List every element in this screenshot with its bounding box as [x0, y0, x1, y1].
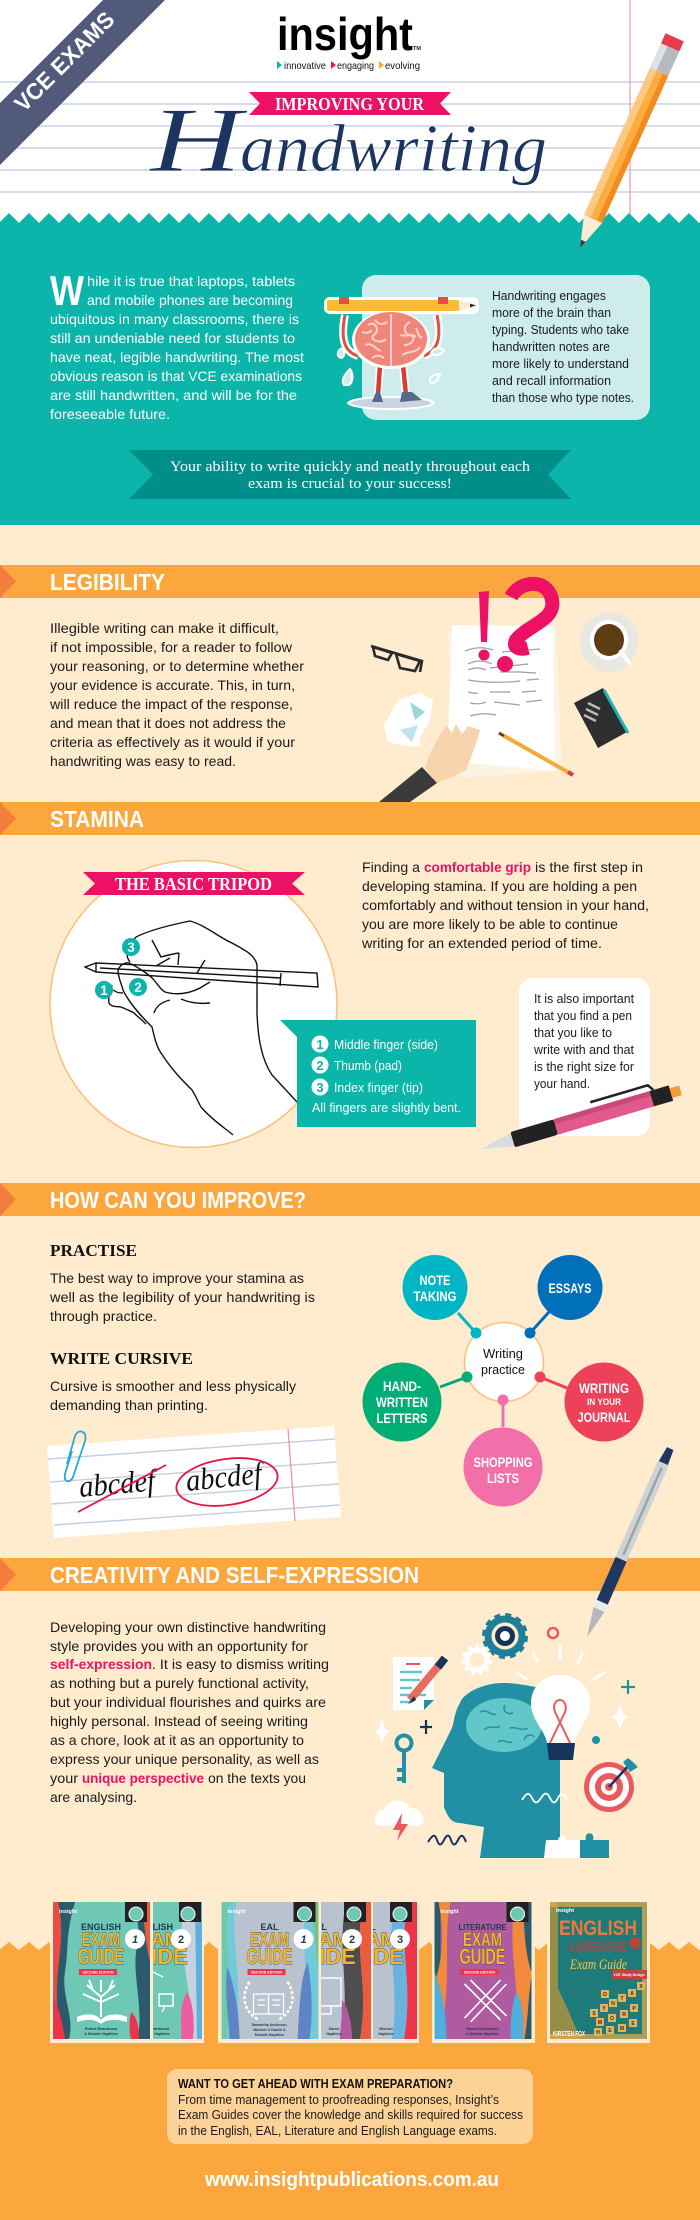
corner banner: VCE EXAMS: VCE EXAMS	[9, 6, 119, 117]
section band: how can you improve: HOW CAN YOU IMPROVE?	[50, 1187, 306, 1213]
callout: finger legend: Index finger (tip)	[334, 1081, 423, 1095]
logo: insight: TM	[413, 46, 421, 52]
callout: choose a pen: your hand.	[534, 1077, 590, 1091]
stamina paragraph	[361, 859, 649, 951]
corner banner: VCE EXAMS	[0, 0, 165, 165]
book: English Language Exam Guide: Exam Guide	[569, 1957, 627, 1973]
creativity paragraph: your	[50, 1770, 78, 1786]
creativity paragraph	[50, 1619, 329, 1805]
node: hand-written letters: HAND-	[383, 1379, 421, 1394]
section band: legibility: LEGIBILITY	[50, 569, 165, 595]
letter tiles: O	[610, 2016, 614, 2022]
book: Literature Exam Guide: EXAM	[463, 1930, 502, 1951]
panel: brain callout: typing. Students who take	[492, 323, 629, 337]
intro paragraph: have neat, legible handwriting. The most	[50, 349, 304, 365]
book frame: EAL	[218, 1901, 419, 2043]
callout: exam preparation	[167, 2069, 533, 2144]
creativity paragraph: are analysing.	[50, 1789, 137, 1805]
creativity paragraph: on the texts you	[208, 1770, 306, 1786]
text: practise: well as the legibility of your handwriting is	[49, 1289, 315, 1305]
text: practise: through practice.	[50, 1308, 157, 1324]
node: writing in your journal	[564, 1362, 644, 1442]
node: shopping lists: LISTS	[487, 1471, 519, 1486]
book: English Exam Guide 1: GUIDE	[78, 1944, 124, 1969]
book: EAL Exam Guide 2: EXAM	[294, 1930, 348, 1951]
book: EAL Exam Guide 3: Michael	[379, 2027, 393, 2031]
book: English Language Exam Guide	[550, 1902, 647, 2039]
text: practise: PRACTISE	[50, 1241, 137, 1260]
creativity paragraph: but your individual flourishes and quirks are	[50, 1694, 326, 1710]
node: hand-written letters: LETTERS	[376, 1411, 428, 1426]
book: English Exam Guide 1	[53, 1902, 150, 2039]
intro paragraph: are still handwritten, and will be for the	[50, 387, 297, 403]
book: EAL Exam Guide 1: SECOND EDITION	[251, 1970, 282, 1974]
book: EAL Exam Guide 1: 1	[300, 1934, 307, 1946]
title: Handwriting: andwriting	[240, 110, 547, 186]
node: centre: Writing	[483, 1346, 523, 1361]
legibility paragraph: will reduce the impact of the response,	[49, 696, 293, 712]
panel: brain callout: and recall information	[492, 374, 611, 388]
intro paragraph: and mobile phones are becoming	[87, 292, 293, 308]
book: English Language Exam Guide: VCE Study Design	[613, 1973, 645, 1977]
icon: pink pen	[477, 1077, 683, 1157]
section band: how can you improve	[0, 1183, 700, 1216]
book: Literature Exam Guide	[434, 1902, 532, 2039]
callout: finger legend	[280, 1020, 476, 1127]
legibility paragraph: Illegible writing can make it difficult,	[50, 620, 279, 636]
icon: silver pen	[582, 1446, 675, 1639]
book: EAL Exam Guide 3: GUIDE	[334, 1944, 404, 1969]
icon: cloud and lightning	[375, 1801, 423, 1841]
book: EAL Exam Guide 3: 3	[397, 1934, 403, 1946]
callout: finger legend: 3	[316, 1080, 324, 1095]
book: EAL Exam Guide 1: Michael O Daniel &	[253, 2028, 286, 2032]
node: shopping lists: SHOPPING	[474, 1455, 532, 1470]
callout: choose a pen: write with and that	[533, 1043, 635, 1057]
text: write cursive: demanding than printing.	[50, 1397, 208, 1413]
callout: choose a pen: that you like to	[534, 1026, 612, 1040]
creativity paragraph: highly personal. Instead of seeing writing	[50, 1713, 308, 1729]
icon: glasses	[371, 646, 422, 672]
book: EAL Exam Guide 1: EXAM	[250, 1930, 289, 1951]
panel: brain callout	[362, 275, 650, 420]
intro paragraph	[50, 267, 304, 422]
node: centre	[464, 1322, 544, 1402]
letter tiles: O	[603, 1992, 607, 1998]
book: EAL Exam Guide 2	[286, 1902, 371, 2039]
legibility paragraph: your evidence is accurate. This, in turn,	[50, 677, 295, 693]
creativity paragraph: self-expression	[50, 1656, 152, 1672]
creativity paragraph: express your unique personality, as well as	[50, 1751, 319, 1767]
letter tiles: M	[598, 2020, 602, 2026]
callout: choose a pen: that you find a pen	[534, 1009, 632, 1023]
title ribbon: improving your: IMPROVING YOUR	[275, 94, 425, 114]
book: Literature Exam Guide: SECOND EDITION	[464, 1970, 495, 1974]
text: practise	[49, 1241, 315, 1324]
illustration: cursive note paper: abcdef	[78, 1462, 160, 1504]
finger badges: 1	[100, 983, 108, 998]
illustration: desk with papers	[371, 584, 638, 802]
icon: paperclip	[65, 1431, 86, 1481]
section band: creativity	[0, 1558, 700, 1591]
illustration: cursive note paper: abcdef	[184, 1455, 267, 1498]
icon: large pencil	[571, 33, 684, 252]
panel: cream background	[0, 525, 700, 1955]
stamina paragraph: comfortable grip	[424, 859, 531, 875]
book: English Exam Guide 1: insight	[59, 1909, 77, 1915]
panel: brain callout: more likely to understand	[492, 357, 629, 371]
creativity paragraph: as a chore, look at it as an opportunity to	[50, 1732, 304, 1748]
panel: teal introduction	[0, 213, 700, 525]
book: Literature Exam Guide: & Melanie Napthine	[466, 2032, 499, 2036]
book: Literature Exam Guide: Robert Beardwood	[466, 2027, 499, 2031]
book: EAL Exam Guide 3	[334, 1902, 417, 2039]
callout: exam preparation: in the English, EAL, Literature and English Language exams.	[178, 2124, 497, 2138]
letter tiles: E	[608, 2028, 612, 2034]
stamina paragraph: comfortably and without tension in your hand,	[362, 897, 649, 913]
icon: document and pencil	[393, 1657, 445, 1710]
book: English Language Exam Guide: KIRSTEN FOX	[553, 2029, 585, 2038]
section band: creativity: CREATIVITY AND SELF-EXPRESSION	[50, 1562, 419, 1588]
ribbon: the basic tripod: THE BASIC TRIPOD	[115, 874, 272, 894]
callout: choose a pen: is the right size for	[534, 1060, 634, 1074]
legibility paragraph	[49, 620, 304, 769]
text: write cursive	[50, 1349, 296, 1413]
section band: stamina	[0, 802, 700, 835]
illustration: tripod grip circle	[50, 860, 337, 1148]
panel: brain callout: Handwriting engages	[492, 289, 606, 303]
creativity paragraph: as nothing but a purely functional activity,	[50, 1675, 309, 1691]
book: English Exam Guide 2: EXAM	[126, 1930, 180, 1951]
node: note taking	[402, 1255, 468, 1320]
callout: finger legend: Middle finger (side)	[334, 1038, 438, 1052]
illustration: cursive note paper	[47, 1426, 341, 1538]
finger badges	[95, 938, 147, 999]
callout: finger legend: All fingers are slightly bent.	[312, 1101, 461, 1115]
book: EAL Exam Guide 2: AL	[315, 1922, 327, 1932]
letter tiles: N	[611, 2001, 615, 2007]
illustration: creative head	[374, 1615, 638, 1858]
book: English Exam Guide 2: ENGLISH	[133, 1922, 173, 1932]
book: English Exam Guide 1: ENGLISH	[81, 1922, 121, 1932]
stamina paragraph: is the first step in	[535, 859, 643, 875]
icon: brain character lifting pencil	[324, 297, 479, 410]
book: EAL Exam Guide 1: insight	[228, 1909, 246, 1915]
legibility paragraph: your reasoning, or to determine whether	[50, 658, 304, 674]
book: EAL Exam Guide 2: Daniel	[329, 2027, 339, 2031]
creativity paragraph: style provides you with an opportunity for	[50, 1638, 308, 1654]
diagram: writing practice	[362, 1255, 644, 1506]
icon: target	[584, 1758, 638, 1812]
ribbon: the basic tripod	[83, 872, 305, 895]
panel: brain callout: than those who type notes.	[492, 391, 634, 405]
book frame: Literature	[432, 1901, 535, 2043]
icon: pen in hand	[85, 921, 318, 1135]
node: hand-written letters	[362, 1362, 442, 1442]
text: write cursive: Cursive is smoother and less physically	[50, 1378, 296, 1394]
book: Literature Exam Guide: insight	[440, 1909, 459, 1915]
icon: light bulb	[516, 1644, 605, 1760]
book: EAL Exam Guide 2: Napthine	[326, 2032, 342, 2036]
book: EAL Exam Guide 2: GUIDE	[286, 1944, 356, 1969]
logo: insight: evolving	[385, 60, 420, 72]
logo: insight: innovative	[284, 60, 326, 72]
callout: choose a pen: It is also important	[534, 992, 635, 1006]
callout: finger legend: 1	[316, 1037, 324, 1052]
icon: key	[396, 1736, 412, 1783]
book: EAL Exam Guide 1: Melanie Napthine	[255, 2033, 284, 2037]
icon: puzzle pieces	[544, 1833, 609, 1858]
callout: choose a pen	[519, 978, 650, 1136]
node: centre: practice	[481, 1362, 525, 1377]
letter tiles: X	[639, 1984, 643, 1990]
logo: insight: engaging	[337, 60, 374, 72]
text: write cursive: WRITE CURSIVE	[50, 1349, 193, 1368]
book: English Exam Guide 1: SECOND EDITION	[83, 1970, 114, 1974]
creativity paragraph: unique perspective	[82, 1770, 204, 1786]
book: EAL Exam Guide 1: EAL	[260, 1922, 279, 1932]
book: EAL Exam Guide 3: Napthine	[378, 2032, 394, 2036]
node: note taking: TAKING	[414, 1289, 456, 1304]
book: English Exam Guide 2: GUIDE	[118, 1944, 188, 1969]
book: English Exam Guide 1: EXAM	[82, 1930, 120, 1951]
legibility paragraph: and mean that it does not address the	[50, 715, 286, 731]
book frame: English	[50, 1901, 204, 2043]
book: EAL Exam Guide 3: L	[370, 1922, 376, 1932]
letter tiles: Y	[602, 2006, 606, 2012]
ribbon: key message: exam is crucial to your success!	[248, 476, 452, 492]
panel: brain callout: more of the brain than	[492, 306, 611, 320]
finger badges: 2	[134, 980, 142, 995]
section band: legibility	[0, 565, 700, 598]
book: Literature Exam Guide: GUIDE	[460, 1944, 506, 1969]
legibility paragraph: handwriting was easy to read.	[50, 753, 236, 769]
book: EAL Exam Guide 1	[222, 1902, 318, 2039]
book: English Exam Guide 2: Robert Beardwood	[137, 2027, 169, 2031]
node: hand-written letters: WRITTEN	[376, 1395, 428, 1410]
stamina paragraph: developing stamina. If you are holding a pen	[362, 878, 637, 894]
letter tiles: E	[631, 2021, 635, 2027]
book: EAL Exam Guide 1: GUIDE	[246, 1944, 292, 1969]
node: writing in your journal: JOURNAL	[578, 1410, 630, 1425]
letter tiles: P	[632, 2006, 636, 2012]
book: Literature Exam Guide: LITERATURE	[458, 1923, 507, 1932]
finger badges: 3	[127, 940, 135, 955]
node: shopping lists	[464, 1428, 542, 1506]
section band: stamina: STAMINA	[50, 806, 144, 832]
callout: exam preparation: From time management to proofreading responses, Insight’s	[178, 2093, 499, 2107]
panel: brain callout: handwritten notes are	[492, 340, 610, 354]
intro paragraph: ubiquitous in many classrooms, there is	[50, 311, 299, 327]
book: English Exam Guide 1: 1	[132, 1934, 138, 1946]
website url: www.insightpublications.com.au	[204, 2169, 499, 2191]
panel: orange footer	[0, 1942, 700, 2220]
node: essays	[538, 1255, 602, 1320]
intro paragraph: W	[50, 267, 84, 314]
creativity paragraph: Developing your own distinctive handwriting	[50, 1619, 326, 1635]
callout: exam preparation: WANT TO GET AHEAD WITH EXAM PREPARATION?	[178, 2077, 453, 2091]
book: EAL Exam Guide 1: Samantha Anderson,	[252, 2023, 287, 2027]
legibility paragraph: criteria as effectively as it would if your	[50, 734, 295, 750]
intro paragraph: foreseeable future.	[50, 406, 170, 422]
intro paragraph: still an undeniable need for students to	[50, 330, 295, 346]
node: writing in your journal: WRITING	[579, 1381, 629, 1396]
book: EAL Exam Guide 3: EXAM	[342, 1930, 396, 1951]
callout: finger legend: 2	[316, 1058, 324, 1073]
book: English Exam Guide 1: & Melanie Napthine	[84, 2032, 118, 2036]
letter tiles: H	[596, 2030, 600, 2036]
node: writing in your journal: IN YOUR	[587, 1397, 621, 1408]
panel: header paper	[0, 0, 700, 225]
book: English Exam Guide 2	[118, 1902, 202, 2039]
book: English Exam Guide 2: & Melanie Napthine	[136, 2032, 170, 2036]
creativity paragraph: . It is easy to dismiss writing	[152, 1656, 329, 1672]
letter tiles: A	[630, 1991, 634, 1997]
stamina paragraph: you are more likely to be able to continue	[362, 916, 618, 932]
letter tiles: R	[622, 2012, 626, 2018]
ribbon: key message	[129, 450, 571, 499]
intro paragraph: hile it is true that laptops, tablets	[87, 273, 295, 289]
letter tiles: S	[592, 2011, 596, 2017]
letter tiles	[590, 1982, 645, 2036]
book frame: English Language	[547, 1901, 650, 2043]
stamina paragraph: Finding a	[362, 859, 420, 875]
book: EAL Exam Guide 2: 2	[349, 1934, 355, 1946]
logo: insight: insight	[277, 8, 413, 60]
ribbon: key message: Your ability to write quickly and neatly throughout each	[170, 459, 531, 475]
intro paragraph: obvious reason is that VCE examinations	[50, 368, 302, 384]
node: essays: ESSAYS	[548, 1281, 592, 1296]
node: note taking: NOTE	[420, 1273, 450, 1288]
letter tiles: T	[620, 1996, 624, 2002]
book: English Exam Guide 1: Robert Beardwood	[85, 2027, 117, 2031]
book: English Exam Guide 2: 2	[178, 1934, 184, 1946]
callout: finger legend: Thumb (pad)	[334, 1059, 402, 1073]
title: Handwriting: H	[149, 89, 248, 191]
callout: exam preparation: Exam Guides cover the knowledge and skills required for success	[178, 2108, 523, 2122]
legibility paragraph: if not impossible, for a reader to follow	[50, 639, 293, 655]
book: English Language Exam Guide: insight	[556, 1908, 574, 1914]
icon: gears	[463, 1615, 526, 1674]
stamina paragraph: writing for an extended period of time.	[361, 935, 602, 951]
letter tiles: M	[620, 2026, 624, 2032]
text: practise: The best way to improve your stamina as	[50, 1270, 304, 1286]
